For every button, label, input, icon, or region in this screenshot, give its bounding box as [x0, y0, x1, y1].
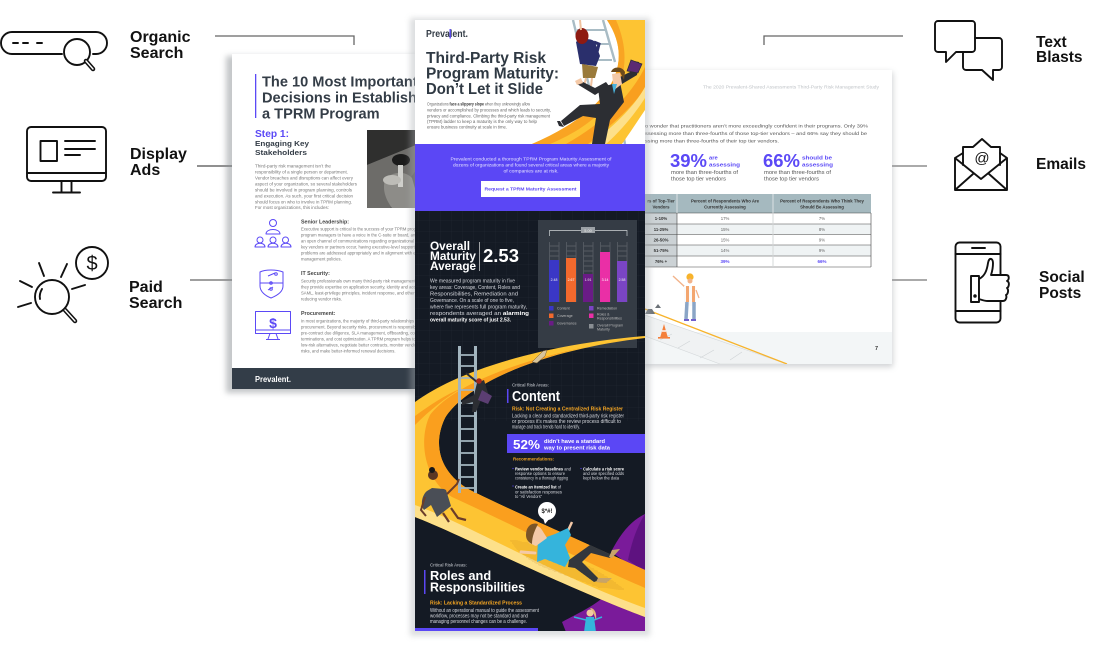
icon: emails: @ — [974, 150, 990, 167]
stat: 66 percent: 66% — [763, 151, 800, 171]
data table: 14% — [721, 248, 729, 253]
intro paragraph: Third-party risk management isn’t the — [255, 164, 332, 168]
data table: 26-50% — [654, 238, 669, 242]
worker illustration — [673, 273, 699, 320]
data table: 11-25% — [654, 227, 668, 232]
bar: coverage: 2.67 — [568, 278, 574, 282]
risk statement: content: Risk: Not Creating a Centralized Risk Register — [512, 406, 623, 412]
dark background — [415, 211, 645, 631]
recommendations: consistency in a thorough rigging — [515, 476, 568, 480]
risk statement: content: Lacking a clear and standardized third-party risk register — [512, 414, 624, 420]
icon: paid search: $ — [86, 253, 98, 275]
bar chart panel — [538, 220, 637, 348]
procurement text: terminations, and cost optimization. A TPRM program helps to identify — [301, 336, 431, 342]
purple banner — [415, 144, 645, 211]
recommendations: to “All Vendors” — [515, 494, 542, 499]
panel: center infographic — [410, 18, 650, 636]
step subheading: Stakeholders — [255, 148, 307, 157]
data table: Percent of Respondents Who Think They — [780, 198, 865, 204]
bar: content: 2.48 — [551, 278, 557, 282]
maturity paragraph: overall maturity score of just 2.53. — [430, 318, 512, 324]
connector: social posts — [870, 279, 927, 281]
procurement text: low-risk alternatives, negotiate better contracts, monitor vendor performance — [301, 342, 443, 348]
critical risk area: content heading: Critical Risk Areas: — [512, 382, 549, 388]
recommendations: Review vendor baselines and — [515, 466, 571, 472]
step heading: Step 1: — [255, 129, 289, 140]
infographic title: Don’t Let it Slide — [426, 81, 543, 98]
next section bar — [415, 628, 538, 631]
risk statement: content — [512, 406, 624, 430]
IT security text: IT Security: — [301, 271, 330, 277]
maturity paragraph: where five represents full program maturity, — [430, 304, 527, 310]
risk statement: roles — [430, 600, 540, 625]
infographic title: Third-Party Risk — [426, 50, 546, 67]
data table: 8% — [819, 227, 825, 232]
data table: Percent of Respondents Who Are — [691, 198, 760, 204]
guide title: a TPRM Program — [262, 106, 380, 122]
intro paragraph: Organizations face a slippery slope when they unknowingly allow — [427, 102, 531, 106]
maturity paragraph: Governance. On a scale of one to five, — [430, 298, 514, 304]
data table: 76% + — [655, 259, 668, 264]
report running header: The 2020 Prevalent-Shared Assessments Third-Party Risk Management Study — [703, 84, 880, 90]
ladder on middle slide — [459, 346, 476, 493]
data table: 17% — [721, 216, 729, 221]
rocks — [645, 304, 661, 314]
maturity paragraph — [430, 278, 529, 324]
data table: Currently Assessing — [704, 204, 746, 210]
call to action button — [481, 181, 580, 197]
risk statement: content: manage and track trends hard to identify. — [512, 424, 580, 430]
heading: Paid Search: Search — [129, 295, 182, 312]
IT security text: SAML, least-privilege principles, incident response, and other tasks related to — [301, 290, 445, 296]
stat: 39 percent: 39% — [670, 151, 707, 171]
intro paragraph: ensure business continuity at scale in time. — [427, 124, 507, 130]
report intro text: ssing more than three-fourths of their top tier vendors. — [645, 138, 779, 144]
maturity paragraph: key areas: Coverage, Content, Roles and — [430, 285, 520, 291]
icon: senior leadership people — [255, 220, 291, 247]
critical risk area: roles heading: Responsibilities — [430, 580, 525, 594]
ladder scale behind bars — [550, 242, 627, 302]
report intro text: ssessing more than three-fourths of those top-tier vendors – and 66% say they should be — [645, 131, 867, 137]
critical risk area: content heading: Content — [512, 389, 560, 405]
icon: paid search — [18, 247, 108, 321]
footer logo: Prevalent. — [255, 375, 291, 384]
stat: 66 percent — [763, 151, 833, 182]
recommendations: or satisfaction responses — [515, 490, 563, 494]
recommendations: Recommendations: — [513, 456, 554, 462]
guide title: The 10 Most Important — [262, 74, 418, 90]
procurement text: risks, and make better-informed renewal decisions. — [301, 348, 396, 354]
chart legend: Content — [557, 306, 570, 310]
stat banner: 52 percent: way to present risk data — [543, 446, 611, 452]
IT security text: they provide expertise on application security, identity and access management, — [301, 284, 449, 290]
intro paragraph: For most organizations, this includes: — [255, 205, 329, 210]
stat: 66 percent: should be — [802, 156, 833, 162]
data table: 7% — [819, 216, 825, 221]
stat banner: 52 percent — [507, 434, 645, 453]
heading: Text Blasts: Text — [1036, 34, 1067, 51]
chart legend: Roles & — [597, 312, 610, 316]
data table — [645, 194, 871, 267]
heading: Social Posts: Posts — [1039, 285, 1081, 302]
data table: 66% — [817, 259, 827, 264]
title accent bar — [255, 74, 256, 118]
senior leadership text: management policies. — [301, 256, 342, 262]
icon: procurement monitor — [256, 312, 290, 340]
intro paragraph: (TPRM) ladder to keep a maturity is the only way to help — [427, 119, 538, 124]
heading: Paid Search: Paid — [129, 279, 163, 296]
road illustration — [645, 309, 787, 364]
bar: roles: 3.14 — [602, 278, 608, 282]
IT security text: Security professionals own many third-party risk management activities because — [301, 278, 450, 284]
guide title: Decisions in Establishing — [262, 90, 439, 106]
bar: remediation: 2.58 — [619, 278, 625, 282]
Prevalent logo: Prevalent. — [426, 29, 468, 40]
chart legend: Overall Program — [597, 324, 623, 328]
risk statement: content: or process it’s makes the review process difficult to — [512, 419, 621, 425]
heading: Text Blasts: Blasts — [1036, 49, 1083, 66]
recommendations: response options to ensure — [515, 471, 565, 476]
risk statement: roles: workflow, processes may not be standard and and — [430, 614, 528, 620]
senior leadership text: problems are addressed appropriately and in alignment with enterprise risk — [301, 250, 440, 256]
chart legend: Responsibilities — [597, 316, 622, 320]
top slide illustration — [532, 20, 645, 144]
icon: IT security shield — [260, 270, 283, 298]
critical risk area: roles heading — [424, 562, 525, 594]
purple slide lower right — [562, 514, 645, 632]
stat: 39 percent: are — [709, 156, 718, 162]
data table: 9% — [819, 238, 825, 242]
icon: social posts phone — [956, 242, 1009, 322]
heading: Organic Search: Organic — [130, 29, 191, 46]
icon: emails — [955, 139, 1007, 190]
senior leadership text: Senior Leadership: — [301, 220, 349, 226]
chart legend — [549, 306, 623, 332]
connector: organic search — [215, 36, 354, 45]
data table: 1-10% — [655, 216, 667, 221]
infographic title — [426, 52, 558, 94]
heading: Display Ads: Ads — [130, 162, 160, 179]
risk statement: roles: Without an operational manual to guide the assessment — [430, 608, 540, 614]
traffic cone — [658, 324, 670, 339]
connector: emails — [870, 165, 927, 167]
report intro text: o wonder that practitioners aren’t more exceedingly confident in their programs. Only 39% — [645, 124, 869, 130]
data table: Should Be Assessing — [800, 204, 844, 210]
intro paragraph: aspect of your organization, so several stakeholders — [255, 182, 357, 186]
overall maturity heading: Average — [430, 259, 477, 273]
intro paragraph — [427, 102, 551, 130]
large middle slide — [415, 336, 645, 617]
data table: 9% — [819, 248, 825, 253]
procurement text — [301, 311, 415, 354]
climbing woman — [576, 20, 600, 86]
climbing man with briefcase — [462, 373, 492, 412]
senior leadership text — [301, 220, 415, 262]
overall maturity heading: 2.53 — [483, 245, 519, 266]
intro paragraph: responsibility of a single person or department. — [255, 170, 348, 174]
overall maturity heading — [430, 239, 519, 273]
step subheading: Engaging Key — [255, 139, 310, 148]
stat: 39 percent: more than three-fourths of — [671, 170, 739, 176]
footer band — [232, 368, 416, 389]
intro paragraph — [255, 164, 357, 210]
maturity paragraph: Responsibilities, Remediation and — [430, 292, 518, 298]
procurement text: procurement. Beyond security risks, procurement is responsible for handling — [301, 324, 443, 330]
speech bubble: $*#! — [541, 509, 553, 515]
person on purple slide — [574, 608, 602, 632]
intro paragraph: should be involved in program planning, controls — [255, 188, 352, 192]
bar: governance: 1.91 — [585, 278, 591, 282]
heading: Organic Search: Search — [130, 45, 183, 62]
risk statement: roles: managing personnel changes can be a challenge. — [430, 619, 527, 625]
chart legend: Coverage — [557, 314, 573, 318]
icon: display ads monitor — [27, 127, 106, 192]
recommendations: Calculate a risk score — [583, 466, 624, 472]
photo — [367, 130, 416, 208]
falling man with briefcase — [557, 60, 642, 144]
stat: 39 percent: those top tier vendors — [671, 176, 727, 182]
purple banner: Prevalent conducted a thorough TPRM Program Maturity Assessment of — [450, 156, 612, 162]
overall maturity heading: Maturity — [430, 249, 476, 263]
senior leadership text: Executive support is critical to the success of your TPRM program. It’s important for the — [301, 226, 463, 232]
stat: 66 percent: those top tier vendors — [764, 176, 820, 182]
data table: 51-75% — [654, 248, 669, 253]
senior leadership text: key vendors or partners occur, having executive-level support ensures that — [301, 244, 440, 250]
step subheading — [255, 140, 309, 155]
infographic title: Program Maturity: — [426, 66, 559, 82]
panel: right report page — [640, 70, 893, 367]
senior leadership text: program managers to have a voice in the C-suite or board, and for there to be — [301, 232, 446, 238]
falling man on slide — [521, 522, 620, 583]
maturity paragraph: We measured program maturity in five — [430, 278, 515, 284]
chart legend: Remediation — [597, 306, 617, 310]
data table: 15% — [721, 238, 729, 242]
IT security text — [301, 271, 415, 302]
heading: Display Ads: Display — [130, 146, 187, 163]
chart legend: Governance — [557, 322, 577, 326]
recommendations: kept below the data — [583, 476, 619, 480]
IT security text: reducing vendor risks. — [301, 296, 342, 302]
maturity paragraph: respondents averaged an alarming — [430, 311, 529, 317]
intro paragraph: vendors or accomplished by processes and which leads to security, — [427, 108, 551, 112]
page number: 7 — [875, 346, 878, 352]
chart legend: Maturity — [597, 328, 610, 332]
critical risk area: roles heading: Critical Risk Areas: — [430, 562, 467, 568]
recommendations: and use specified odds — [583, 471, 625, 476]
procurement text: Procurement: — [301, 311, 336, 317]
intro paragraph: privacy and compliance. Climbing the third-party risk management — [427, 114, 551, 118]
icon: text blasts — [935, 21, 1002, 80]
risk statement: roles: Risk: Lacking a Standardized Process — [430, 600, 522, 606]
stat: 66 percent: assessing — [802, 162, 833, 168]
sliding woman — [421, 467, 466, 522]
overall maturity heading: Overall — [430, 239, 470, 253]
stat: 39 percent: assessing — [709, 162, 740, 168]
senior leadership text: an open channel of communications regarding organizational risk. When issues with — [301, 238, 457, 244]
ladder behind top slide — [573, 20, 625, 144]
purple banner: dozens of organizations and found several critical areas where a majority — [453, 162, 610, 168]
critical risk area: content heading — [507, 382, 560, 405]
connector: text blasts — [764, 36, 903, 45]
heading: Emails: Emails — [1036, 156, 1086, 173]
procurement text: pre-contract due diligence, SLA management, offboarding, contract — [301, 330, 426, 336]
stat banner: 52 percent: didn’t have a standard — [544, 439, 605, 445]
purple banner: of companies are at risk. — [504, 168, 558, 174]
page footer band — [645, 332, 892, 364]
heading: Social Posts: Social — [1039, 269, 1085, 286]
speech bubble — [538, 502, 556, 524]
intro paragraph: should focus on who to involve in TPRM planning. — [255, 200, 352, 204]
intro paragraph: and execution. As such, your first critical decision — [255, 194, 354, 198]
icon: organic search — [1, 32, 107, 69]
stat: 39 percent — [670, 151, 740, 182]
stat: 66 percent: more than three-fourths of — [764, 170, 832, 176]
data table: 15% — [721, 227, 729, 232]
connector: display ads — [197, 165, 241, 167]
critical risk area: roles heading: Roles and — [430, 568, 491, 583]
data table: rs of Top-Tier — [647, 198, 675, 204]
bar chart panel: 5.00 — [584, 229, 592, 233]
icon: procurement monitor: $ — [269, 315, 277, 331]
intro paragraph: Vendor breaches and disruptions can affect every — [255, 176, 354, 180]
procurement text: In most organizations, the majority of third-party relationships originate through — [301, 318, 447, 324]
data table: 39% — [720, 259, 730, 264]
connector: paid search — [190, 279, 241, 281]
data table: Vendors — [653, 204, 670, 210]
recommendations — [512, 456, 625, 499]
recommendations: Create an itemized list of — [515, 484, 562, 490]
stat banner: 52 percent: 52% — [513, 437, 540, 452]
panel: left guide page — [223, 53, 415, 396]
tiny sliding figure — [532, 350, 547, 363]
call to action button: Request a TPRM Maturity Assessment — [484, 186, 577, 192]
report intro text — [645, 124, 869, 144]
